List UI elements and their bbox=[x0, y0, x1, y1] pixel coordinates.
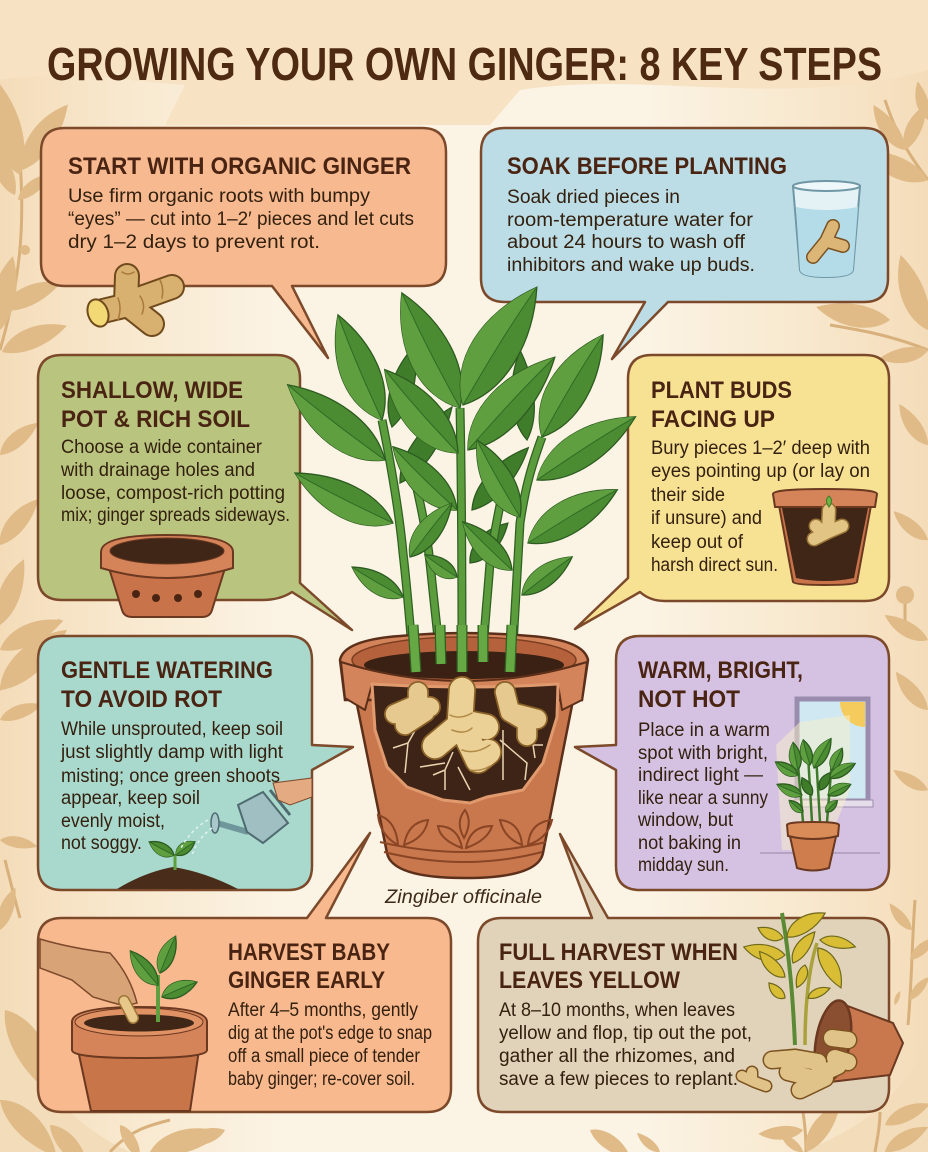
central pot with cutaway bbox=[340, 625, 588, 878]
body text: Soak dried pieces in bbox=[507, 187, 680, 208]
icon: hand harvesting from pot bbox=[40, 933, 207, 1111]
panel: start with organic ginger bbox=[41, 128, 446, 358]
panel: full harvest bbox=[478, 834, 903, 1112]
heading bbox=[61, 657, 273, 713]
body text: While unsprouted, keep soil bbox=[61, 719, 283, 740]
icon: window with potted plant bbox=[760, 699, 880, 870]
heading: START WITH ORGANIC GINGER bbox=[68, 153, 411, 180]
heading: SOAK BEFORE PLANTING bbox=[507, 153, 787, 180]
body text: Place in a warm bbox=[638, 720, 770, 741]
panel: plant buds facing up bbox=[575, 355, 889, 629]
body text: spot with bright, bbox=[638, 743, 768, 764]
heading: LEAVES YELLOW bbox=[499, 967, 680, 994]
body text: After 4–5 months, gently bbox=[228, 1000, 418, 1021]
body text: appear, keep soil bbox=[61, 788, 200, 809]
body text: with drainage holes and bbox=[60, 460, 255, 481]
body text: loose, compost-rich potting bbox=[61, 483, 285, 504]
body text: Choose a wide container bbox=[61, 437, 263, 458]
body text: harsh direct sun. bbox=[651, 555, 778, 576]
heading: GINGER EARLY bbox=[228, 967, 385, 994]
body text bbox=[60, 437, 290, 526]
body text: room-temperature water for bbox=[507, 210, 754, 231]
body text: Use firm organic roots with bumpy bbox=[68, 186, 371, 207]
panel: warm bright not hot bbox=[575, 636, 889, 890]
heading bbox=[499, 939, 738, 994]
body text bbox=[60, 719, 284, 854]
heading: SHALLOW, WIDE bbox=[61, 377, 243, 404]
body text bbox=[507, 187, 755, 276]
heading: NOT HOT bbox=[638, 686, 740, 713]
carved pattern bbox=[378, 810, 552, 862]
back leaves bbox=[381, 342, 537, 569]
pot body bbox=[352, 680, 577, 878]
body text: dig at the pot's edge to snap bbox=[228, 1023, 432, 1044]
heading: HARVEST BABY bbox=[228, 939, 390, 966]
body text bbox=[637, 720, 770, 876]
body text bbox=[499, 1000, 752, 1090]
heading: POT & RICH SOIL bbox=[61, 406, 250, 433]
body text bbox=[651, 438, 870, 576]
heading bbox=[61, 377, 250, 433]
body text: midday sun. bbox=[638, 855, 729, 876]
central ginger plant bbox=[275, 274, 644, 663]
heading: FACING UP bbox=[651, 406, 775, 433]
panel: soak before planting bbox=[481, 128, 888, 359]
body text: dry 1–2 days to prevent rot. bbox=[68, 232, 320, 253]
heading: GENTLE WATERING bbox=[61, 657, 273, 684]
pot rim bbox=[340, 633, 588, 700]
body text: At 8–10 months, when leaves bbox=[499, 1000, 735, 1021]
body text: if unsure) and bbox=[651, 508, 762, 529]
body text: misting; once green shoots bbox=[61, 766, 280, 787]
body text: their side bbox=[651, 485, 725, 506]
body text: evenly moist, bbox=[61, 811, 165, 832]
body text: eyes pointing up (or lay on bbox=[651, 461, 870, 482]
body text: indirect light — bbox=[638, 765, 763, 786]
rim interior bbox=[352, 637, 576, 683]
rhizomes bbox=[395, 690, 537, 770]
heading bbox=[638, 657, 803, 713]
icon: shallow pot bbox=[101, 535, 233, 617]
panel: gentle watering bbox=[38, 636, 353, 890]
body text: yellow and flop, tip out the pot, bbox=[499, 1023, 752, 1044]
soil surface bbox=[364, 651, 564, 679]
body text: Bury pieces 1–2′ deep with bbox=[651, 438, 870, 459]
icon: pot cross-section with bud bbox=[773, 489, 877, 585]
rim front band and collar bbox=[341, 662, 587, 710]
body text: gather all the rhizomes, and bbox=[499, 1046, 735, 1067]
icon: ginger root bbox=[84, 272, 172, 330]
body text: window, but bbox=[637, 810, 734, 831]
heading: WARM, BRIGHT, bbox=[638, 657, 803, 684]
body text: off a small piece of tender bbox=[228, 1046, 421, 1067]
icon: watering can and seedling bbox=[117, 778, 312, 889]
icon: yellowing plant, tipped pot and rhizomes bbox=[742, 905, 903, 1090]
body text: just slightly damp with light bbox=[60, 742, 284, 763]
foliage bbox=[275, 274, 644, 607]
panel: shallow wide pot and rich soil bbox=[38, 355, 352, 630]
body text: save a few pieces to replant. bbox=[499, 1069, 738, 1090]
cutaway soil bbox=[372, 684, 558, 803]
roots bbox=[393, 727, 543, 790]
heading bbox=[651, 377, 792, 433]
body text: like near a sunny bbox=[638, 788, 768, 809]
body text: mix; ginger spreads sideways. bbox=[61, 505, 290, 526]
icon: glass of water bbox=[793, 181, 860, 277]
stem bases bbox=[413, 625, 512, 672]
heading bbox=[228, 939, 390, 994]
heading: PLANT BUDS bbox=[651, 377, 792, 404]
stems bbox=[382, 408, 542, 663]
heading: FULL HARVEST WHEN bbox=[499, 939, 738, 966]
caption: Zingiber officinale bbox=[384, 887, 542, 908]
body text: not soggy. bbox=[61, 833, 142, 854]
panel: harvest baby ginger bbox=[38, 833, 451, 1112]
body text: about 24 hours to wash off bbox=[507, 232, 746, 253]
body text bbox=[228, 1000, 432, 1090]
body text: not baking in bbox=[638, 833, 741, 854]
body text: baby ginger; re-cover soil. bbox=[228, 1069, 415, 1090]
body text: keep out of bbox=[651, 532, 744, 553]
heading: TO AVOID ROT bbox=[61, 686, 222, 713]
body text bbox=[68, 186, 414, 253]
body text: “eyes” — cut into 1–2′ pieces and let cuts bbox=[68, 209, 414, 230]
body text: inhibitors and wake up buds. bbox=[507, 255, 755, 276]
